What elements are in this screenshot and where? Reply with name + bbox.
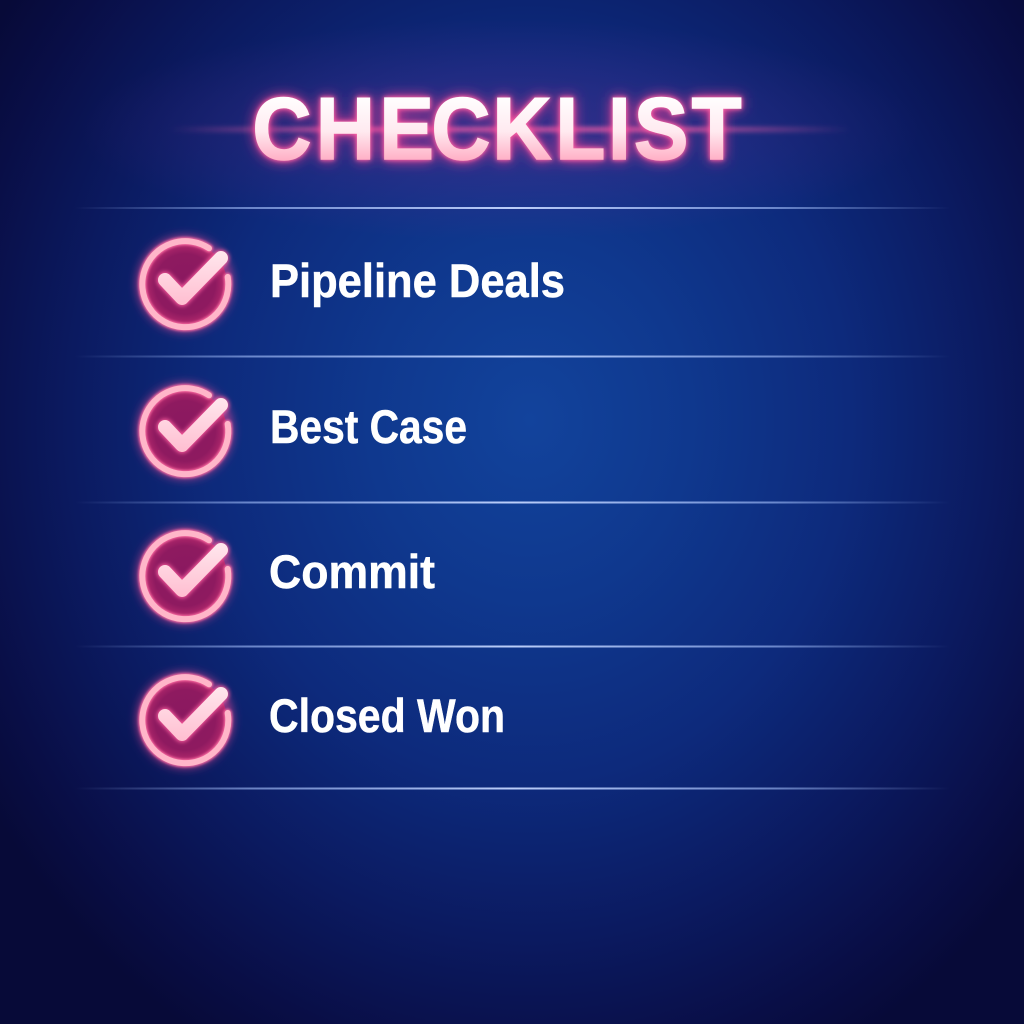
icon: check circle <box>142 388 228 474</box>
label: Best Case: Best Case <box>270 400 467 453</box>
label: Closed Won: Closed Won <box>269 689 505 742</box>
checklist row: Closed Won <box>142 677 505 763</box>
label: Commit: Commit <box>269 545 435 598</box>
icon: check circle <box>142 533 228 619</box>
title: CHECKLIST: CHECKLIST <box>252 80 742 179</box>
icon: check circle <box>142 241 228 327</box>
label: Pipeline Deals: Pipeline Deals <box>270 254 565 307</box>
checklist row: Pipeline Deals <box>142 241 565 327</box>
checklist row: Commit <box>142 533 435 619</box>
title: CHECKLIST: CHECKLIST <box>252 80 742 179</box>
icon: check circle <box>142 677 228 763</box>
checklist row: Best Case <box>142 388 467 474</box>
divider lines <box>75 207 950 790</box>
title: CHECKLIST: CHECKLIST <box>252 80 742 179</box>
